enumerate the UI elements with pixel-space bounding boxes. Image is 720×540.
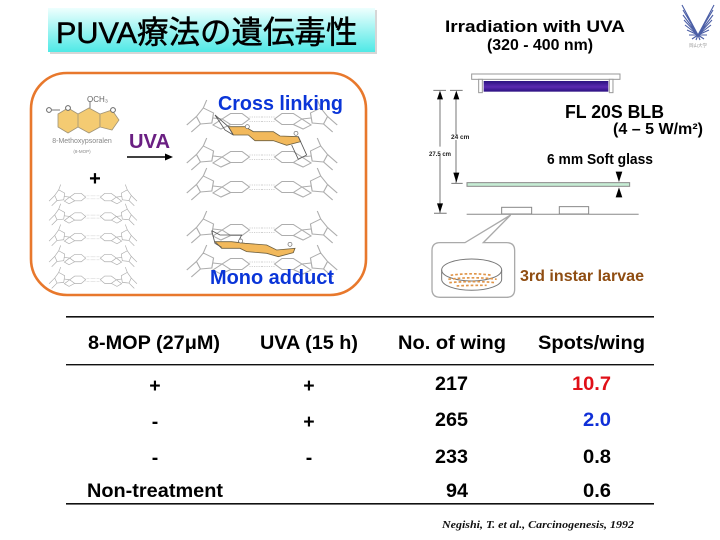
label: cross linking: Cross linking [218,93,343,115]
table header: 8-MOP (27μM) [88,332,220,354]
label: lamp model: (4 – 5 W/m²) [613,121,703,138]
icon: 8-MOP molecule [47,95,119,154]
title banner: PUVA療法の遺伝毒性 [56,14,358,50]
icon: DNA double helix [49,184,137,288]
table rows: 0.6 [583,480,611,502]
label: lamp model [565,102,703,138]
table rows: 265 [435,409,468,431]
heading: irradiation [445,17,625,54]
icon: 8-MOP molecule: 8-Methoxypsoralen [52,138,112,145]
citation: Negishi, T. et al., Carcinogenesis, 1992 [441,520,634,531]
label: plus: + [89,168,101,190]
table rows: - [152,411,158,433]
table rows: + [303,411,315,433]
heading: irradiation: Irradiation with UVA [445,17,625,36]
icon: university logo: 岡山大学 [689,42,707,49]
heading: irradiation: (320 - 400 nm) [487,37,593,54]
table rows [87,373,611,502]
icon: university logo [682,5,714,49]
table rows: + [149,375,161,397]
glass plate [467,172,630,197]
label: larvae: 3rd instar larvae [520,268,644,285]
table rows: - [306,447,312,469]
callout: dish with larvae [432,215,515,297]
icon: 8-MOP molecule: (8-MOP) [73,149,91,154]
icon: psoralen-DNA adducts [187,100,337,277]
bench and dishes [467,207,639,214]
table rows: 233 [435,446,468,468]
table rows: Non-treatment [87,480,224,502]
height arrows [433,90,463,213]
label: lamp model: FL 20S BLB [565,102,664,122]
dimension: 24 cm: 24 cm [451,134,470,141]
table rows: 94 [446,480,468,502]
table: wing spot results [66,316,654,505]
table header: No. of wing [398,332,506,354]
table rows: - [152,447,158,469]
table rows: 0.8 [583,446,611,468]
lamp [472,74,620,93]
label: soft glass: 6 mm Soft glass [547,151,653,168]
panel: PUVA reaction [31,73,366,295]
table rows: 217 [435,373,468,395]
label: UVA: UVA [129,131,170,153]
table rows: 10.7 [572,373,611,395]
icon: 8-MOP molecule: OCH₃ [87,95,108,104]
arrow: reaction [127,154,173,160]
table rows: 2.0 [583,409,611,431]
label: mono adduct: Mono adduct [210,267,334,289]
diagram: irradiation setup [432,74,639,297]
dimension: 27.5 cm: 27.5 cm [429,152,451,158]
table header [88,332,645,354]
table header: Spots/wing [538,332,645,354]
table rows: + [303,375,315,397]
table header: UVA (15 h) [260,332,358,354]
